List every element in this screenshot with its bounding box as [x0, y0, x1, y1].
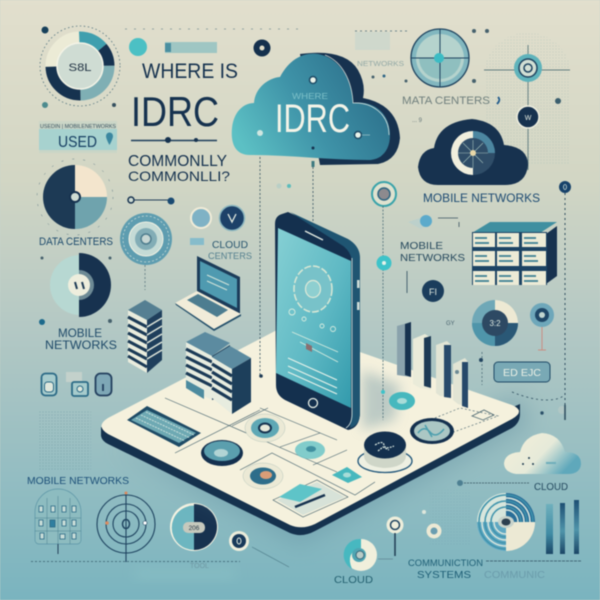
icon: laptop [175, 256, 241, 331]
label: data centers: DATA CENTERS [39, 236, 113, 248]
chart: donut right [446, 300, 518, 346]
label: mobile networks left: MOBILE [58, 326, 102, 340]
label: cloud right [457, 480, 568, 493]
icon: round button map [410, 418, 454, 444]
title: where is IDRC commonly used [128, 60, 238, 184]
label: cloud right: CLOUD [534, 481, 568, 493]
label: cloud centers: CLOUD [212, 239, 248, 251]
connector: dashed line from cloud to server [259, 157, 291, 378]
icon: server tower small [128, 300, 162, 373]
chart: three bars [486, 500, 582, 561]
icon: keyboard [127, 406, 201, 447]
chart: half pie bottom: 206 [189, 525, 200, 532]
divider: bottom dashed baseline: TOOL [190, 563, 209, 570]
icon: platform tile badges [243, 392, 415, 515]
chart: radial gauge top right [411, 29, 469, 87]
icons: lower pin badges [386, 510, 442, 556]
connector: dashed line cloud to phone [312, 167, 314, 250]
panel: data center rack grid [472, 222, 557, 285]
icon: big cloud: WHERE [292, 92, 328, 101]
chart: donut right: 3:2 [489, 319, 501, 328]
label: mobile networks left: NETWORKS [45, 338, 117, 352]
label: cloud centers: CENTERS [208, 251, 252, 262]
label: communication systems: COMMUNIC [484, 570, 545, 581]
label: communication systems: COMMUNICTION [408, 558, 483, 569]
title: where is IDRC commonly used: IDRC [131, 88, 219, 135]
label: communication systems [408, 558, 545, 581]
label: mata centers [402, 95, 499, 124]
icon: teal node pin [372, 182, 396, 420]
icon: smartphone [275, 212, 360, 430]
label: mobile networks lower: MOBILE NETWORKS [27, 475, 129, 487]
label: mobile networks small [400, 240, 465, 264]
panel: speckle behind radial [430, 490, 470, 545]
title: where is IDRC commonly used: COMMONLLI? [128, 168, 230, 184]
icon: round target dial [120, 213, 172, 290]
icon: concentric target [97, 492, 155, 562]
icon: connector node [128, 197, 174, 204]
icon: server pair [186, 332, 251, 414]
chart: half pie bottom [170, 503, 218, 551]
title: where is IDRC commonly used: WHERE IS [142, 60, 238, 83]
icon: round button dark [358, 432, 412, 472]
icon: big cloud [232, 53, 400, 167]
banner: used [39, 121, 117, 153]
panel: dotted sphere with target [484, 32, 570, 170]
chart: spiral radial [477, 493, 535, 551]
title: where is IDRC commonly used: COMMONLLY [128, 153, 227, 170]
chart: pie data centers [37, 159, 113, 235]
banner: used: USED [58, 134, 97, 151]
icon: small badge [229, 531, 289, 567]
connector: dashed route with pin [512, 181, 571, 420]
icon: faded text cluster top [355, 29, 489, 83]
label: cloud bottom: CLOUD [334, 574, 373, 586]
chart: half donut [39, 253, 112, 325]
label: mata centers: MATA CENTERS [402, 95, 490, 107]
icon: mini globe pin [408, 215, 459, 229]
banner: used: USEDIN | MOBILENETWORKS [40, 124, 116, 130]
label: mobile networks small: NETWORKS [400, 252, 465, 264]
label: mobile networks left [45, 326, 117, 352]
divider: bottom dashed baseline [31, 562, 240, 580]
panel: isometric platform [101, 328, 530, 545]
icon: badge and tick [407, 271, 444, 302]
label box: status pill [494, 362, 550, 382]
label: mobile networks: MOBILE NETWORKS [423, 191, 540, 205]
chart: bar blocks on platform [397, 322, 494, 420]
label: mobile networks small: MOBILE [400, 240, 443, 252]
icon: cloud donut [344, 539, 393, 571]
icons: cloud badges [190, 206, 244, 245]
icons: title row [125, 29, 300, 56]
icon: dark cloud [418, 119, 528, 185]
icon: target with pin [479, 303, 554, 385]
panel: dotted sphere with target: W [525, 115, 532, 122]
label box: status pill: ED EJC [503, 368, 541, 379]
icon: badge and tick: FI [429, 287, 437, 297]
icons: padlocks [42, 372, 112, 396]
chart: donut top left [40, 26, 120, 108]
label: cloud centers [208, 239, 252, 262]
label: communication systems: SYSTEMS [417, 570, 471, 581]
label: mata centers: ... 9 [412, 118, 423, 124]
icon: big cloud: IDRC [275, 97, 350, 141]
chart: donut right: GY [446, 321, 455, 327]
chart: donut top left: S8L [68, 62, 92, 74]
icon: platform disc left [201, 440, 243, 466]
icon: grid of locks [35, 489, 81, 554]
icon: pale cloud [504, 433, 581, 474]
panel: dotted texture [38, 410, 91, 470]
icon: faded text cluster top: NETWORKS [357, 61, 404, 68]
